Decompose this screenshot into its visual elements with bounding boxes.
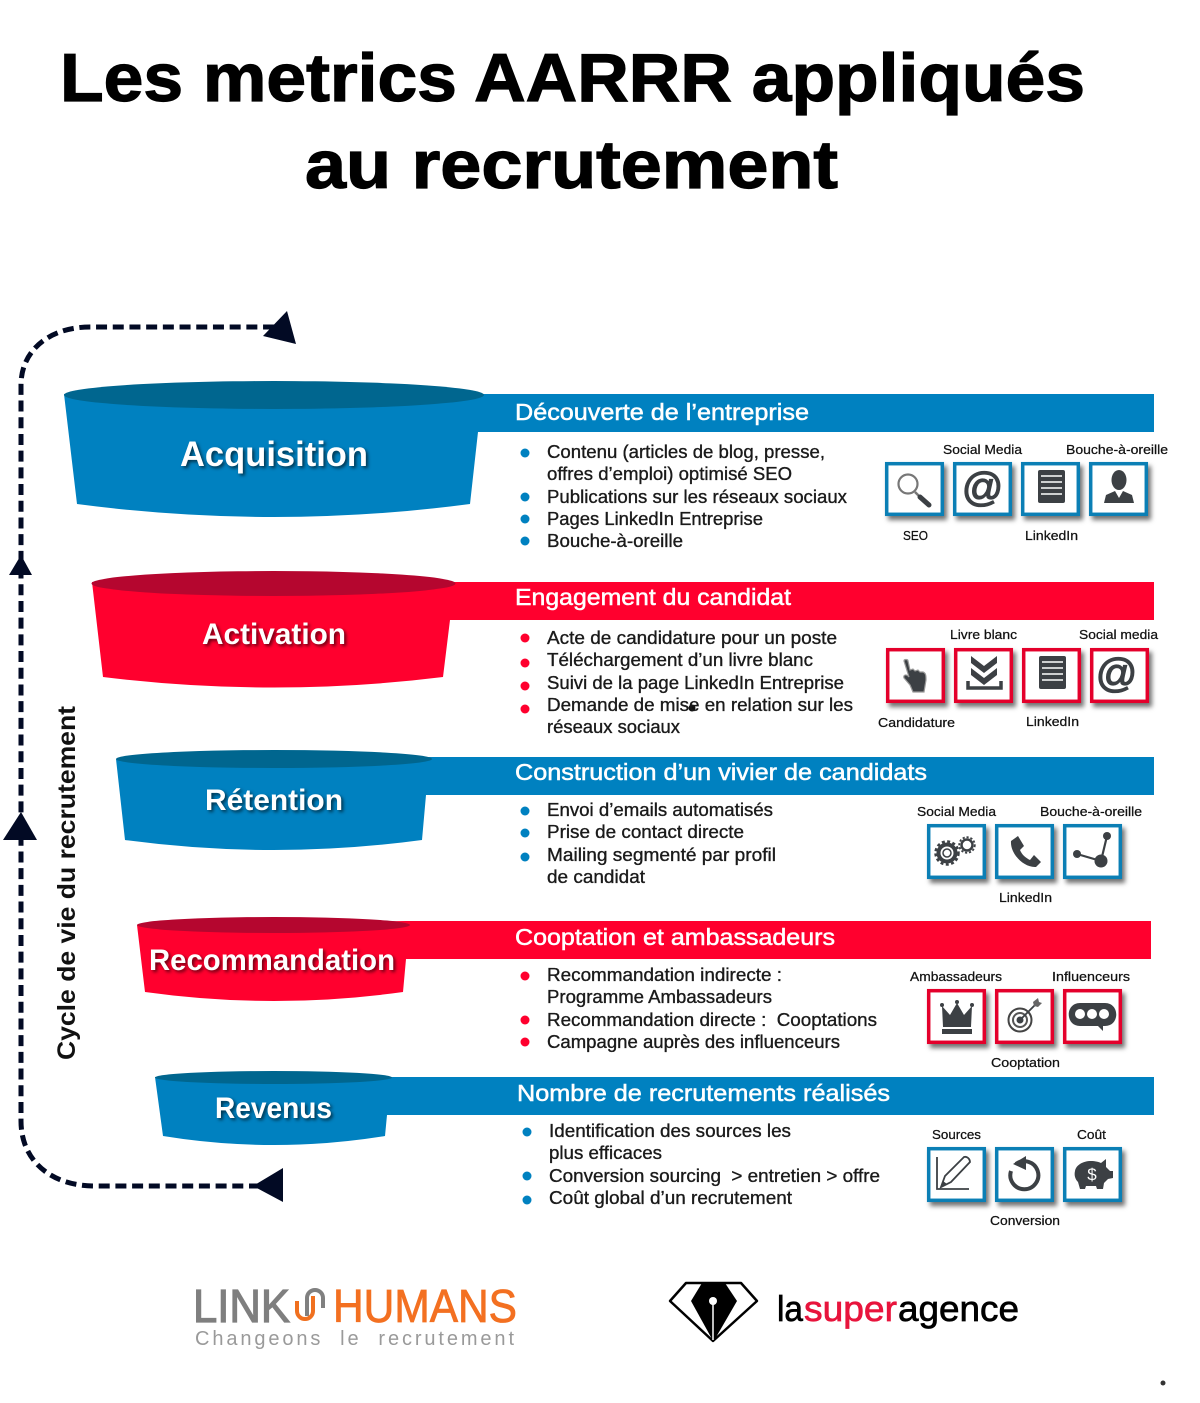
bullet list: Suivi de la page LinkedIn Entreprise <box>547 673 844 693</box>
logo: la super agence: agence <box>898 1288 1019 1329</box>
logo: Link Humans: LINK <box>193 1280 290 1332</box>
title: Les metrics AARRR appliqués <box>60 40 1085 116</box>
icon row <box>910 969 1131 1070</box>
logo: Link Humans: Changeons le recrutement <box>195 1328 514 1350</box>
icon row: @ <box>962 464 1003 510</box>
lifecycle loop arrow <box>3 311 296 1202</box>
bullet list: Prise de contact directe <box>547 822 744 842</box>
funnel: retention <box>116 750 1154 850</box>
panel: revenus <box>155 1071 1154 1228</box>
icon row: Bouche-à-oreille <box>1066 442 1168 457</box>
logo: la super agence <box>670 1283 1019 1341</box>
bullet list: Bouche-à-oreille <box>547 531 683 551</box>
icon row: Ambassadeurs <box>910 969 1003 984</box>
icon row: Livre blanc <box>950 627 1018 642</box>
bullet list: Programme Ambassadeurs <box>547 987 772 1007</box>
panel: retention <box>116 750 1154 905</box>
icon row: Sources <box>932 1127 982 1142</box>
stray dot <box>1160 1380 1166 1386</box>
funnel: activation <box>92 571 1154 688</box>
logo: Link Humans <box>193 1280 517 1350</box>
panel: recommandation <box>137 917 1151 1070</box>
bullet list: Campagne auprès des influenceurs <box>547 1032 840 1052</box>
icon row: SEO <box>903 528 928 543</box>
bullet list: offres d’emploi) optimisé SEO <box>547 464 792 484</box>
heading: Cooptation et ambassadeurs <box>515 924 835 950</box>
funnel: acquisition <box>64 381 1154 517</box>
bullet list: Conversion sourcing > entretien > offre <box>549 1166 880 1186</box>
bullet list: réseaux sociaux <box>547 717 680 737</box>
bullet list <box>520 800 776 887</box>
bullet list: Mailing segmenté par profil <box>547 845 776 865</box>
title <box>60 40 1085 203</box>
icon row: Coût <box>1077 1127 1106 1142</box>
funnel: activation: Activation <box>202 618 346 651</box>
bullet list: Envoi d’emails automatisés <box>547 800 773 820</box>
icon row: Candidature <box>878 715 955 730</box>
bullet list: Pages LinkedIn Entreprise <box>547 509 763 529</box>
icon row: Social Media <box>943 442 1023 457</box>
icon row: LinkedIn <box>1025 528 1078 543</box>
funnel: recommandation <box>137 917 1151 1001</box>
logo: Link Humans: HUMANS <box>333 1280 517 1332</box>
icon row: Cooptation <box>991 1055 1060 1070</box>
heading: Construction d’un vivier de candidats <box>515 759 927 785</box>
icon row: @ <box>1096 650 1137 696</box>
heading: Découverte de l’entreprise <box>515 399 809 425</box>
bullet list: Demande de mise en relation sur les <box>547 695 853 715</box>
bullet list: Téléchargement d’un livre blanc <box>547 650 813 670</box>
panel: activation <box>92 571 1159 737</box>
icon row: Social media <box>1079 627 1159 642</box>
bullet list <box>520 442 847 551</box>
heading: Engagement du candidat <box>515 584 792 610</box>
icon row <box>917 804 1142 905</box>
logo: la super agence: la <box>777 1288 804 1329</box>
bullet list: Publications sur les réseaux sociaux <box>547 487 847 507</box>
bullet list: de candidat <box>547 867 645 887</box>
bullet list: Coût global d’un recrutement <box>549 1188 792 1208</box>
icon row: Bouche-à-oreille <box>1040 804 1142 819</box>
icon row <box>929 1127 1120 1228</box>
bullet list: Acte de candidature pour un poste <box>547 628 837 648</box>
bullet list: plus efficaces <box>549 1143 662 1163</box>
heading: Nombre de recrutements réalisés <box>517 1080 890 1106</box>
bullet list <box>520 965 877 1052</box>
funnel: revenus: Revenus <box>215 1092 332 1125</box>
bullet list: Identification des sources les <box>549 1121 791 1141</box>
funnel: retention: Rétention <box>205 784 343 817</box>
icon row: LinkedIn <box>1026 714 1079 729</box>
icon row: Conversion <box>990 1213 1060 1228</box>
funnel: acquisition: Acquisition <box>180 435 368 474</box>
bullet list: Contenu (articles de blog, presse, <box>547 442 825 462</box>
icon row: Social Media <box>917 804 997 819</box>
bullet list <box>520 628 853 737</box>
icon row <box>887 442 1168 543</box>
funnel: recommandation: Recommandation <box>149 944 395 977</box>
funnel: revenus <box>155 1071 1154 1145</box>
title: au recrutement <box>305 127 838 203</box>
icon row <box>878 627 1159 730</box>
bullet list <box>522 1121 880 1208</box>
logo: la super agence: super <box>804 1288 897 1329</box>
bullet list: Recommandation indirecte : <box>547 965 782 985</box>
panel: acquisition <box>64 381 1168 551</box>
bullet list: Recommandation directe : Cooptations <box>547 1010 877 1030</box>
vertical label: Cycle de vie du recrutement <box>53 705 81 1060</box>
icon row: LinkedIn <box>999 890 1052 905</box>
icon row: Influenceurs <box>1052 969 1131 984</box>
